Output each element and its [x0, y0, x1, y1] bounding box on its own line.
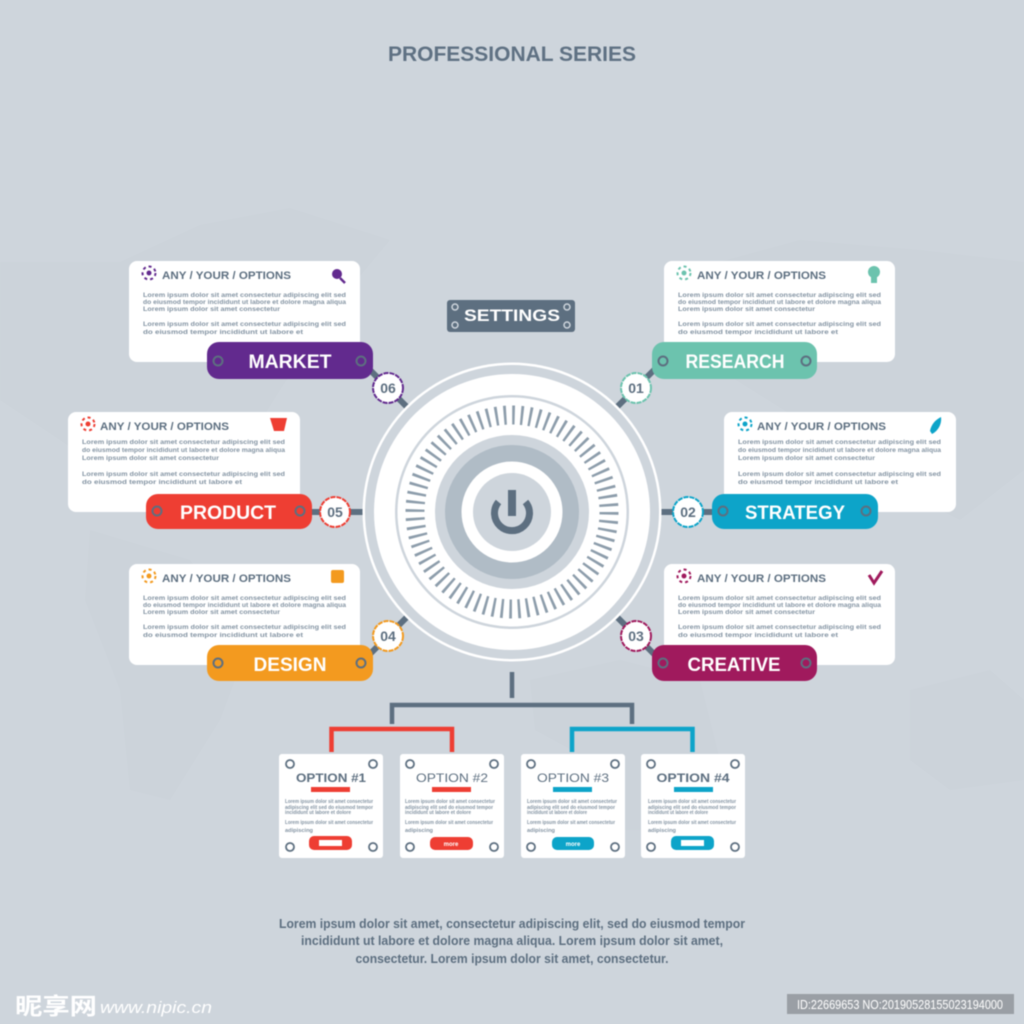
strategy heading: ANY / YOUR / OPTIONS: [757, 421, 886, 433]
badge 05: 05: [327, 504, 343, 520]
design label pill: DESIGN: [254, 655, 326, 676]
product label pill: [146, 494, 312, 529]
card: option 1: incididunt ut labore et dolore: [285, 810, 351, 816]
creative label pill: CREATIVE: [688, 655, 780, 676]
strategy label pill: STRATEGY: [745, 503, 845, 524]
icon: layers: [331, 570, 344, 583]
market label pill: MARKET: [248, 352, 332, 373]
creative body text: do eiusmod tempor incididunt ut labore et dolore magna aliqua: [678, 603, 882, 609]
badge 06: [373, 373, 403, 403]
card: option 4: adipiscing: [648, 828, 676, 834]
badge 04: 04: [380, 628, 396, 644]
design body text: Lorem ipsum dolor sit amet consectetur adipiscing elit sed: [143, 596, 346, 602]
card: option 4: Lorem ipsum dolor sit amet consectetur: [648, 799, 736, 805]
card: option 2: [400, 754, 504, 858]
panel: design: [129, 564, 373, 681]
strategy body text: [738, 440, 942, 486]
card: option 1: Lorem ipsum dolor sit amet consectetur: [285, 799, 373, 805]
research label pill: RESEARCH: [686, 352, 784, 373]
panel: strategy: [712, 412, 956, 529]
badge 02: 02: [680, 504, 696, 520]
footer paragraph: [279, 917, 745, 966]
icon: market target: [142, 266, 156, 280]
product body text: Lorem ipsum dolor sit amet consectetur adipiscing elit sed: [82, 472, 285, 478]
product body text: Lorem ipsum dolor sit amet consectetur adipiscing elit sed: [82, 440, 285, 446]
settings tag: [447, 300, 575, 332]
market label pill: [207, 342, 373, 379]
card: option 3: adipiscing elit sed do eiusmod tempor: [527, 805, 615, 811]
card: option 4: OPTION #4: [656, 771, 730, 785]
badge 01: [621, 373, 651, 403]
card: option 2: Lorem ipsum dolor sit amet consectetur: [405, 820, 493, 826]
badge 04: [373, 621, 403, 651]
icon: bulb: [868, 266, 880, 283]
watermark: site logo: www.nipic.cn: [100, 998, 212, 1017]
market body text: do eiusmod tempor incididunt ut labore et dolore magna aliqua: [143, 300, 347, 306]
card: option 2: Lorem ipsum dolor sit amet consectetur: [405, 799, 495, 805]
icon: check mark: [869, 571, 882, 583]
strategy body text: do eiusmod tempor incididunt ut labore et dolore magna aliqua: [738, 448, 942, 454]
product body text: Lorem ipsum dolor sit amet consectetur: [82, 456, 220, 462]
card: option 3: Lorem ipsum dolor sit amet consectetur: [527, 799, 617, 805]
card: option 3: adipiscing: [527, 828, 555, 834]
central power dial: [362, 362, 662, 662]
market body text: Lorem ipsum dolor sit amet consectetur adipiscing elit sed: [143, 293, 346, 299]
dial tick ring: [415, 415, 609, 609]
strategy body text: do eiusmod tempor incididunt ut labore et: [738, 480, 898, 486]
research label pill: [652, 342, 817, 379]
card: option 2: adipiscing: [405, 828, 433, 834]
creative body text: do eiusmod tempor incididunt ut labore et: [678, 633, 838, 639]
card: option 4: [641, 754, 745, 858]
panel: market: [129, 261, 373, 379]
watermark: site logo: 昵享网: [15, 993, 97, 1019]
design body text: do eiusmod tempor incididunt ut labore et dolore magna aliqua: [143, 603, 347, 609]
badge 06: 06: [380, 380, 396, 396]
product body text: do eiusmod tempor incididunt ut labore et dolore magna aliqua: [82, 448, 286, 454]
creative body text: Lorem ipsum dolor sit amet consectetur adipiscing elit sed: [678, 625, 881, 631]
strategy body text: Lorem ipsum dolor sit amet consectetur: [738, 456, 876, 462]
tree connector: blue: [572, 729, 692, 752]
footer paragraph: incididunt ut labore et dolore magna aliqua. Lorem ipsum dolor sit amet,: [301, 934, 723, 948]
market body text: [143, 293, 347, 336]
market body text: do eiusmod tempor incididunt ut labore et: [143, 330, 303, 336]
creative heading: ANY / YOUR / OPTIONS: [697, 573, 826, 585]
watermark: id bar: [787, 994, 1014, 1014]
footer paragraph: consectetur. Lorem ipsum dolor sit amet, consectetur.: [356, 952, 668, 966]
strategy label pill: [712, 494, 878, 529]
tree connector: grey: [392, 672, 632, 724]
icon: feather: [930, 417, 941, 434]
strategy body text: Lorem ipsum dolor sit amet consectetur adipiscing elit sed: [738, 472, 941, 478]
badge 03: [621, 621, 651, 651]
badge 03: 03: [628, 628, 644, 644]
title: PROFESSIONAL SERIES: [388, 43, 636, 66]
tree connector: red: [332, 729, 452, 752]
icon: basket: [270, 418, 287, 431]
card: option 3: OPTION #3: [537, 771, 609, 785]
design body text: Lorem ipsum dolor sit amet consectetur: [143, 610, 281, 616]
card: option 4: Lorem ipsum dolor sit amet consectetur: [648, 820, 736, 826]
card: option 2: OPTION #2: [416, 771, 488, 785]
card: option 4: incididunt ut labore et dolore: [648, 810, 708, 816]
panel: product: [68, 412, 312, 529]
card: option 4: adipiscing elit sed do eiusmod tempor: [648, 805, 736, 811]
product body text: do eiusmod tempor incididunt ut labore et: [82, 480, 242, 486]
badge 05: [320, 497, 350, 527]
icon: creative target: [678, 570, 690, 582]
design body text: do eiusmod tempor incididunt ut labore et: [143, 633, 303, 639]
research heading: ANY / YOUR / OPTIONS: [697, 270, 826, 282]
icon: power symbol: [495, 490, 530, 531]
badge 01: 01: [628, 380, 644, 396]
creative body text: Lorem ipsum dolor sit amet consectetur adipiscing elit sed: [678, 596, 881, 602]
card: option 3: Lorem ipsum dolor sit amet consectetur: [527, 820, 615, 826]
card: option 3: more: [566, 842, 581, 848]
card: option 3: incididunt ut labore et dolore: [527, 810, 587, 816]
card: option 1: Lorem ipsum dolor sit amet consectetur: [285, 820, 373, 826]
research body text: do eiusmod tempor incididunt ut labore et: [678, 330, 838, 336]
market heading: ANY / YOUR / OPTIONS: [162, 270, 291, 282]
design heading: ANY / YOUR / OPTIONS: [162, 573, 291, 585]
card: option 2: incididunt ut labore et dolore: [405, 810, 471, 816]
research body text: Lorem ipsum dolor sit amet consectetur adipiscing elit sed: [678, 322, 881, 328]
icon: design target: [142, 570, 156, 582]
product body text: [82, 440, 286, 486]
card: option 2: more: [444, 842, 459, 848]
panel: creative: [652, 564, 895, 681]
watermark: site logo: [15, 993, 212, 1019]
market body text: Lorem ipsum dolor sit amet consectetur adipiscing elit sed: [143, 322, 346, 328]
research body text: Lorem ipsum dolor sit amet consectetur adipiscing elit sed: [678, 293, 881, 299]
card: option 1: adipiscing: [285, 828, 313, 834]
research body text: do eiusmod tempor incididunt ut labore et dolore magna aliqua: [678, 300, 882, 306]
product label pill: PRODUCT: [180, 503, 276, 524]
footer paragraph: Lorem ipsum dolor sit amet, consectetur adipiscing elit, sed do eiusmod tempor: [279, 917, 745, 931]
card: option 1: adipiscing elit sed do eiusmod tempor: [285, 805, 373, 811]
design body text: Lorem ipsum dolor sit amet consectetur adipiscing elit sed: [143, 625, 346, 631]
creative body text: Lorem ipsum dolor sit amet consectetur: [678, 610, 816, 616]
icon: product target: [82, 418, 94, 430]
creative body text: [678, 596, 882, 639]
product heading: ANY / YOUR / OPTIONS: [100, 421, 229, 433]
badge 02: [673, 497, 703, 527]
panel: research: [652, 261, 895, 379]
background world map: [0, 208, 1024, 830]
card: option 1: OPTION #1: [296, 771, 366, 785]
design label pill: [207, 645, 373, 681]
card: option 2: adipiscing elit sed do eiusmod tempor: [405, 805, 493, 811]
card: option 1: [279, 754, 383, 858]
research body text: Lorem ipsum dolor sit amet consectetur: [678, 307, 816, 313]
card: option 3: [521, 754, 625, 858]
connector spokes: [310, 366, 714, 658]
icon: research target: [678, 266, 690, 280]
settings tag: SETTINGS: [464, 306, 560, 325]
icon: magnifier: [332, 269, 345, 283]
creative label pill: [652, 645, 817, 681]
icon: strategy target: [738, 418, 752, 430]
market body text: Lorem ipsum dolor sit amet consectetur: [143, 307, 281, 313]
design body text: [143, 596, 347, 639]
research body text: [678, 293, 882, 336]
strategy body text: Lorem ipsum dolor sit amet consectetur adipiscing elit sed: [738, 440, 941, 446]
